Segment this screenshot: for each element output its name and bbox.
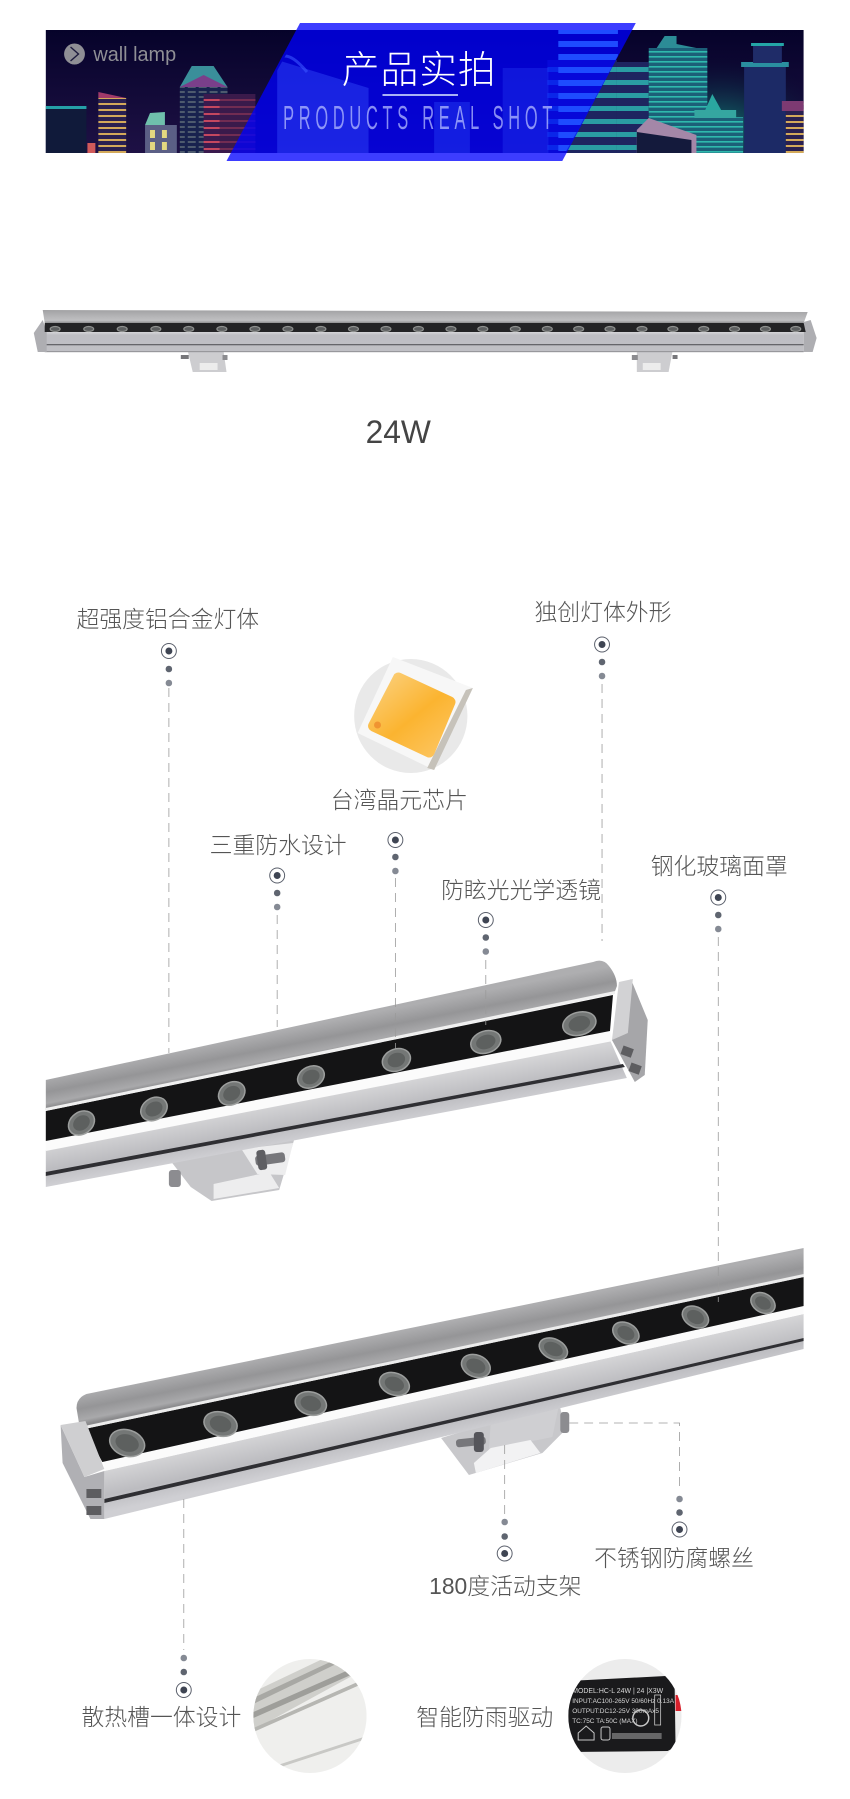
brackets bbox=[181, 351, 678, 372]
reflector hood bbox=[43, 310, 808, 323]
label: heat sink bbox=[81, 1655, 241, 1730]
wall lamp tag: wall lamp bbox=[92, 44, 176, 66]
product photo: angled lamp bottom bbox=[61, 1248, 804, 1519]
black panel bbox=[84, 1277, 804, 1462]
label: waterproof bbox=[210, 832, 347, 910]
icon: driver closeup: TC:75C TA:50C (MAX) bbox=[572, 1718, 638, 1725]
product photo: angled lamp top bbox=[46, 961, 648, 1201]
marker: chip bbox=[388, 832, 403, 874]
end cap bbox=[61, 1421, 104, 1519]
label: stainless screw: 不锈钢防腐螺丝 bbox=[594, 1545, 754, 1571]
label: unique body shape bbox=[534, 599, 672, 679]
banner title: 产品实拍 bbox=[342, 50, 497, 92]
label: aluminium body: 超强度铝合金灯体 bbox=[76, 606, 259, 632]
black LED strip bbox=[45, 323, 806, 332]
label: heat sink: 散热槽一体设计 bbox=[81, 1704, 241, 1730]
label: unique body shape: 独创灯体外形 bbox=[534, 599, 672, 625]
LEDs bbox=[64, 1008, 599, 1140]
label: tempered glass bbox=[651, 853, 788, 932]
icon: driver closeup: MODEL:HC-L 24W | 24 |X3W bbox=[572, 1688, 664, 1695]
LED row bbox=[50, 326, 801, 332]
icon: driver closeup bbox=[568, 1659, 682, 1773]
label: optical lens bbox=[441, 877, 601, 955]
label: aluminium body bbox=[76, 606, 259, 686]
banner subtitle: PRODUCTS REAL SHOT bbox=[283, 99, 552, 137]
banner: products real shot bbox=[46, 23, 804, 161]
icon: heat sink closeup bbox=[253, 1656, 367, 1776]
white strip bbox=[46, 1031, 613, 1151]
body bbox=[104, 1314, 804, 1519]
label: driver: 智能防雨驱动 bbox=[416, 1704, 553, 1730]
blue parallelogram bbox=[227, 23, 636, 161]
leader lines bbox=[169, 684, 718, 1650]
icon: driver closeup: INPUT:AC100-265V 50/60Hz 0.13A bbox=[572, 1698, 675, 1705]
label: stainless screw bbox=[594, 1496, 754, 1571]
end cap bbox=[612, 979, 648, 1082]
LEDs bbox=[106, 1288, 779, 1461]
reflector hood bbox=[46, 961, 617, 1110]
label: 180 degree bracket bbox=[429, 1519, 581, 1599]
label: 180 degree bracket: 180度活动支架 bbox=[429, 1573, 581, 1599]
label: tempered glass: 钢化玻璃面罩 bbox=[651, 853, 788, 879]
product photo: 24W lamp front view bbox=[34, 310, 817, 372]
end caps bbox=[34, 320, 47, 352]
bracket bbox=[169, 1140, 294, 1201]
icon: driver closeup: OUTPUT:DC12-25V 300mAx5 bbox=[572, 1708, 659, 1715]
body bbox=[46, 1040, 627, 1187]
lamp body bbox=[45, 332, 804, 352]
wattage label: 24W bbox=[366, 414, 431, 450]
label: waterproof: 三重防水设计 bbox=[210, 832, 347, 858]
icon: LED chip bbox=[354, 657, 473, 773]
bracket bbox=[441, 1408, 569, 1475]
black panel bbox=[46, 995, 613, 1141]
reflector hood bbox=[76, 1248, 804, 1429]
label: chip: 台湾晶元芯片 bbox=[331, 787, 468, 813]
ghost buildings bbox=[277, 30, 618, 153]
white strip bbox=[104, 1306, 804, 1471]
label: optical lens: 防眩光光学透镜 bbox=[441, 877, 601, 903]
